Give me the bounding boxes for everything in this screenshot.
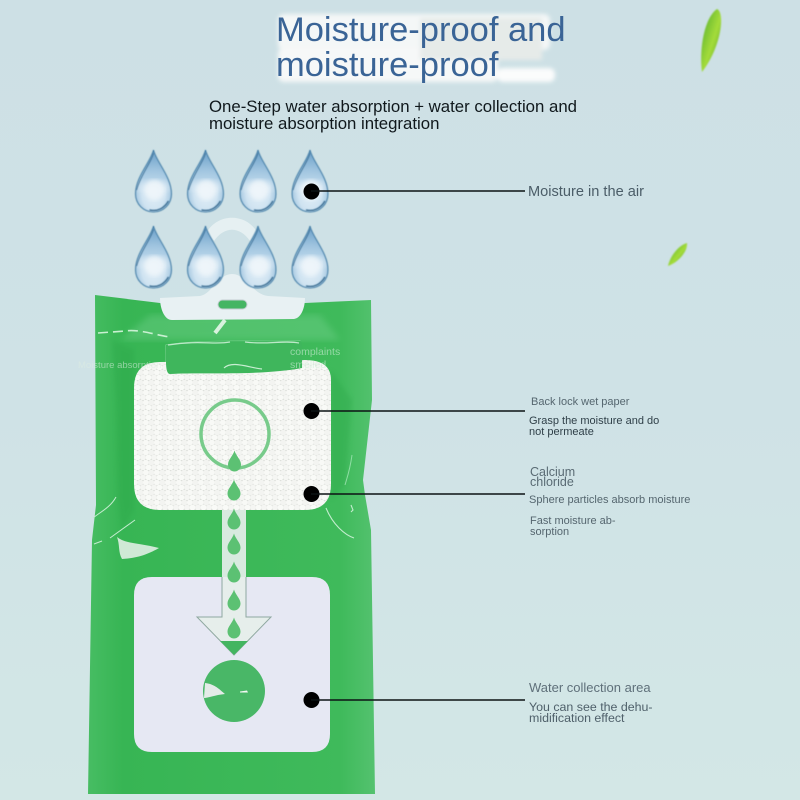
- text: fast moisture absorption: [530, 514, 616, 538]
- label: calcium chloride: chloride: [530, 474, 574, 488]
- text: sphere particles: Sphere particles absorb moisture: [529, 494, 690, 506]
- callout lines: [304, 184, 525, 708]
- watermark text right: smelled: [290, 359, 326, 371]
- collection circle: [203, 660, 265, 722]
- watermark text right: complaints: [290, 346, 340, 358]
- water drops: [136, 150, 328, 288]
- title: [276, 11, 566, 84]
- side folds: [112, 340, 134, 530]
- watermark text left: Moisture absorption: [78, 360, 161, 371]
- plastic sheen: [117, 537, 159, 559]
- packet seal strip: [166, 341, 302, 372]
- label: calcium chloride: [530, 464, 575, 488]
- watermark text right: [290, 346, 340, 371]
- packet: [88, 295, 375, 794]
- circle highlight: [204, 683, 225, 698]
- text: fast moisture absorption: sorption: [530, 526, 569, 538]
- text: fast moisture absorption: Fast moisture ab-: [530, 514, 616, 526]
- hanger plate: [160, 274, 305, 320]
- title highlight: [278, 14, 555, 82]
- subtitle: [209, 96, 577, 133]
- subtitle: moisture absorption integration: [209, 114, 439, 133]
- label: calcium chloride: Calcium: [530, 464, 575, 478]
- label: back lock wet paper: Back lock wet paper: [531, 396, 629, 408]
- arrow: [197, 510, 271, 655]
- pellet window: [134, 360, 331, 510]
- text: grasp the moisture: not permeate: [529, 426, 594, 438]
- bag handle: [207, 218, 257, 241]
- packet body: [88, 295, 375, 794]
- text: dehumidification effect: You can see the dehu-: [529, 700, 653, 714]
- text: dehumidification effect: midification effect: [529, 711, 625, 725]
- seal strip front: [166, 341, 302, 374]
- collection window: [134, 577, 330, 752]
- title: Moisture-proof and: [276, 11, 566, 49]
- title: moisture-proof: [276, 46, 498, 84]
- arrow tip fill: [220, 641, 248, 655]
- text: dehumidification effect: [529, 700, 653, 725]
- leaf: large: [701, 9, 721, 72]
- packet top crease: [98, 331, 170, 337]
- text: grasp the moisture: Grasp the moisture and do: [529, 415, 659, 427]
- label: water collection area: Water collection area: [529, 680, 651, 695]
- ring: [201, 400, 269, 468]
- label: moisture in the air: Moisture in the air: [528, 184, 644, 200]
- text: grasp the moisture: [529, 415, 659, 438]
- subtitle: One-Step water absorption + water collection and: [209, 96, 577, 116]
- green droplets: [228, 450, 241, 638]
- leaf: small: [668, 243, 687, 266]
